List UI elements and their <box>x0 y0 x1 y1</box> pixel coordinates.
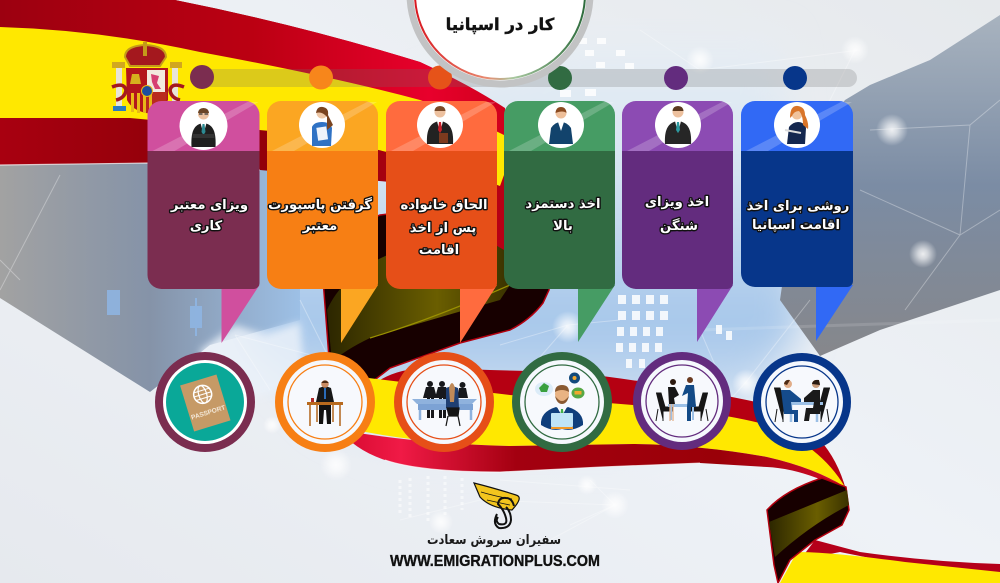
timeline dot 3 <box>428 66 452 90</box>
icon: interview panel <box>394 352 494 452</box>
title: کار در اسپانیا <box>446 15 555 35</box>
step label: ویزای معتبر <box>170 198 248 213</box>
avatar: man in suit <box>655 102 701 148</box>
step label: گرفتن پاسپورت <box>268 197 372 213</box>
step 6 second line: اقامت اسپانیا <box>752 218 840 233</box>
step label: الحاق خانواده <box>400 198 488 213</box>
ribbon: Spanish flag top band <box>0 0 560 250</box>
timeline dot 1 <box>190 65 214 89</box>
ribbon: lower band with black fold <box>320 200 1000 583</box>
step 3 second line: پس از اخذ <box>410 221 476 236</box>
avatar: woman with tablet <box>774 102 820 148</box>
step label: اخذ ویزای <box>645 195 709 210</box>
icon: person at desk <box>275 352 375 452</box>
logo: Emigration Plus <box>390 483 600 570</box>
panel: step 4 high salary <box>504 101 615 342</box>
icon: passport badge <box>155 352 255 452</box>
panel: step 5 golden visa <box>622 101 733 342</box>
avatar: man in glasses <box>180 102 228 150</box>
icon: seated meeting <box>753 353 851 451</box>
title badge <box>410 0 590 84</box>
timeline dot 6 <box>783 66 807 90</box>
avatar: man with folder <box>417 102 463 148</box>
panel: step 1 valid work visa <box>148 101 260 343</box>
website url: WWW.EMIGRATIONPLUS.COM <box>390 553 600 570</box>
panel: step 3 family reunion <box>386 101 497 343</box>
panel: step 2 valid passport <box>267 101 378 343</box>
panel: step 6 ways to get residency <box>741 101 853 341</box>
step 2 second line: معتبر <box>302 219 337 234</box>
step 3 third line: اقامت <box>419 243 459 258</box>
timeline bar <box>190 65 857 90</box>
step label: روشی برای اخذ <box>747 199 849 214</box>
avatar: businesswoman <box>538 102 584 148</box>
timeline dot 5 <box>664 66 688 90</box>
timeline dot 2 <box>309 66 333 90</box>
timeline dot 4 <box>548 66 572 90</box>
icon: passport badge: PASSPORT <box>190 404 226 422</box>
company name: سفیران سروش سعادت <box>427 533 561 548</box>
step 5 second line: شنگن <box>660 218 698 234</box>
icon: employee with laptop <box>512 352 612 452</box>
step label: اخذ دستمزد <box>525 197 601 212</box>
icon: swan wing <box>474 483 519 528</box>
step 4 second line: بالا <box>553 219 573 234</box>
step 1 second line: کاری <box>190 219 222 234</box>
icon: handshake standing <box>633 352 731 450</box>
icon: Spanish coat of arms <box>112 42 184 113</box>
avatar: woman with papers <box>299 102 345 148</box>
